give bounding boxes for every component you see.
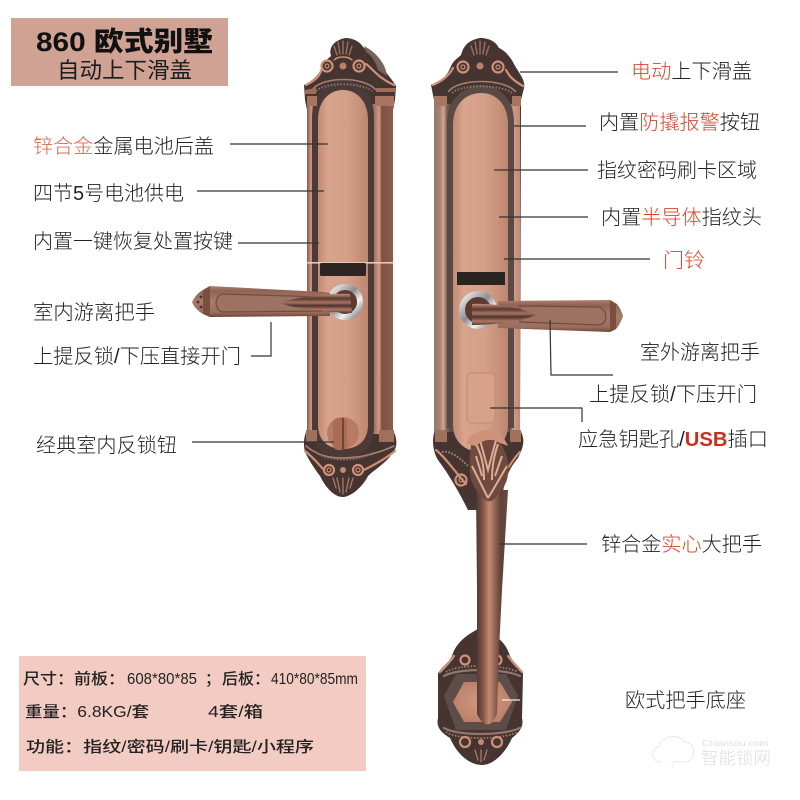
header: product title box [11, 18, 228, 86]
lock: right exterior plate [431, 38, 524, 510]
label: alarm button: 内置防撬报警按钮 [599, 111, 760, 134]
label: fingerprint area: 指纹密码刷卡区域 [597, 159, 757, 182]
lock: right lever handle [462, 294, 623, 332]
right top ornament scrolls [433, 41, 523, 106]
watermark [653, 737, 771, 768]
label: solid pull handle: 锌合金实心大把手 [601, 533, 762, 556]
spec panel: 功能：指纹/密码/刷卡/钥匙/小程序 [26, 737, 314, 756]
leader line: sensor [499, 216, 588, 218]
label: semiconductor sensor: 内置半导体指纹头 [601, 206, 762, 229]
left keypad sensor strip [307, 262, 393, 276]
lock: left lever handle [192, 286, 360, 317]
right inner panel [453, 93, 508, 452]
label: exterior lock operation: 上提反锁/下压开门 [589, 383, 757, 406]
right key cover [467, 373, 495, 423]
leader line: thumb-turn [192, 441, 334, 443]
header: product title box: 自动上下滑盖 [57, 58, 192, 83]
spec panel: 410*80*85mm [271, 671, 358, 688]
leader line: sliding cover [520, 71, 618, 73]
label: batteries: 四节5号电池供电 [33, 182, 184, 205]
left thumb-turn [327, 417, 359, 450]
label: doorbell: 门铃 [663, 249, 705, 272]
handle shaft [476, 490, 508, 724]
handle base plate [438, 628, 523, 765]
left top ornament scrolls [305, 41, 396, 106]
right keypad sensor strip [457, 272, 505, 285]
lock: left interior plate [304, 38, 396, 497]
label: zinc alloy back cover: 锌合金金属电池后盖 [33, 135, 214, 158]
leader line: zinc alloy cover [230, 143, 328, 145]
leader line: interior lift [251, 322, 271, 356]
left inner panel [318, 90, 368, 449]
spec panel: 608*80*85 [127, 671, 197, 688]
right chrome rose [462, 294, 494, 326]
leader line: emergency key [490, 408, 582, 422]
leader line: alarm button [514, 125, 586, 127]
spec panel: 尺寸：前板： [23, 670, 125, 688]
spec panel [19, 656, 366, 771]
leader line: fingerprint area [494, 169, 588, 171]
pull handle with base [438, 430, 523, 765]
label: exterior lever: 室外游离把手 [640, 341, 760, 364]
leader line: batteries [197, 190, 324, 192]
leader line: pull handle [500, 543, 587, 545]
leader line: exterior lever [550, 320, 613, 375]
leader line: reset [238, 242, 319, 244]
left bottom ornament [305, 430, 395, 494]
label: interior lock operation: 上提反锁/下压直接开门 [33, 345, 241, 368]
spec panel: 重量：6.8KG/套 [25, 703, 150, 721]
label: handle base: 欧式把手底座 [625, 689, 746, 712]
label: interior lever: 室内游离把手 [33, 301, 155, 324]
spec panel: 后板： [222, 670, 270, 688]
watermark: 智能锁网 [701, 749, 771, 768]
label: electric sliding cover: 电动上下滑盖 [631, 60, 752, 83]
icon: cloud [653, 737, 694, 768]
leader line: base [502, 699, 520, 701]
handle leaf crown [470, 434, 509, 501]
label: reset button: 内置一键恢复处置按键 [33, 230, 233, 253]
right bottom ornament [435, 430, 521, 486]
spec panel: 4套/箱 [208, 703, 263, 721]
header: product title box: 860 欧式别墅 [36, 27, 213, 57]
left chrome rose [330, 287, 360, 317]
leader line: doorbell [504, 258, 650, 260]
watermark: Chiansou.com [702, 739, 768, 748]
label: thumb-turn: 经典室内反锁钮 [36, 434, 177, 457]
label: emergency key and USB: 应急钥匙孔/USB插口 [578, 428, 768, 451]
spec panel: ； [205, 671, 221, 688]
